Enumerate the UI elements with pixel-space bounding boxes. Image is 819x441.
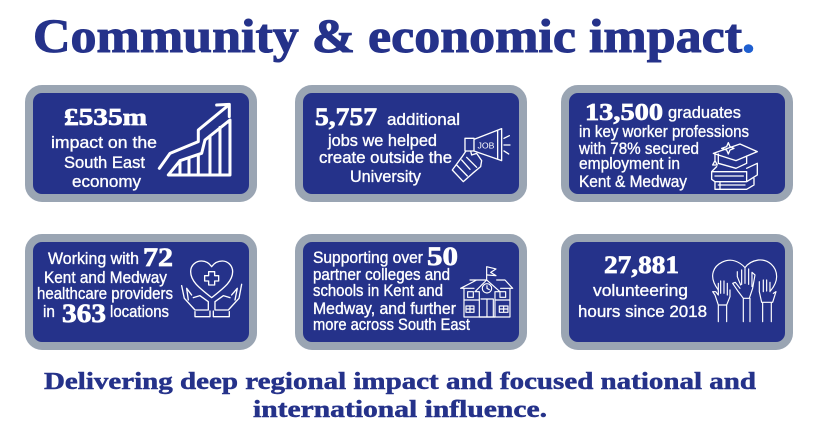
text: partner description: partner colleges and: [313, 266, 450, 284]
statistic: 27,881: 27,881: [604, 252, 679, 279]
text: jobs description: jobs we helped: [327, 132, 437, 150]
text: healthcare description: in: [43, 303, 55, 321]
text: partner description: more across South East: [313, 316, 470, 334]
icon: school building with flag: [461, 267, 513, 317]
text: partner description: Supporting over: [313, 249, 423, 267]
closing statement: [44, 369, 757, 423]
title: Community & economic impact .: [33, 10, 755, 63]
text: graduates description: with 78% secured: [578, 140, 699, 158]
text: healthcare description: healthcare providers: [37, 285, 173, 303]
text: volunteering description: [578, 282, 707, 321]
text: impact description: economy: [72, 173, 142, 191]
panel: partner colleges and schools: [299, 238, 523, 346]
panel: economic impact: [29, 89, 253, 198]
text: volunteering description: volunteering: [593, 282, 688, 300]
closing statement: Delivering deep regional impact and focused national and: [44, 369, 757, 395]
text: graduates description: employment in: [579, 155, 680, 173]
card frame: [29, 89, 253, 198]
text: healthcare description: Kent and Medway: [44, 269, 168, 287]
panel: additional jobs: [299, 89, 523, 198]
text: partner description: schools in Kent and: [313, 282, 443, 300]
statistic: 363: 363: [62, 299, 106, 328]
card frame: [29, 238, 253, 346]
icon: megaphone held in fist: [452, 129, 510, 182]
text: healthcare description: [37, 250, 173, 321]
card frame: [565, 89, 789, 198]
text: graduates description: [578, 104, 749, 191]
text: graduates description: Kent & Medway: [579, 173, 688, 191]
text: jobs description: create outside the: [319, 149, 452, 167]
text: impact description: [51, 134, 157, 191]
panel: healthcare providers: [29, 238, 253, 346]
statistic: 50: 50: [427, 242, 458, 271]
icon: hands holding heart with cross: [182, 261, 242, 317]
text: impact description: South East: [64, 154, 145, 172]
card frame: [565, 238, 789, 346]
icon: rising chart with arrow: [159, 104, 230, 175]
text: partner description: Medway, and further: [313, 300, 456, 318]
panel: graduates: [565, 89, 789, 198]
text: graduates description: graduates: [668, 104, 741, 122]
text: jobs description: University: [350, 168, 422, 186]
text: graduates description: in key worker professions: [579, 123, 749, 141]
icon: megaphone held in fist: JOB: [478, 141, 495, 151]
closing statement: international influence.: [253, 397, 547, 423]
statistic: 13,500: 13,500: [585, 100, 663, 126]
card frame: [299, 238, 523, 346]
text: healthcare description: locations: [110, 303, 169, 321]
text: jobs description: [319, 111, 460, 186]
statistic: 72: 72: [143, 243, 173, 272]
statistic: £535m: £535m: [64, 105, 147, 131]
panel: volunteering hours: [565, 238, 789, 346]
card frame: [299, 89, 523, 198]
text: jobs description: additional: [387, 111, 460, 129]
icon: raised hands in front of heart: [713, 260, 777, 322]
icon: graduation cap on books: [712, 143, 757, 189]
text: impact description: impact on the: [51, 134, 157, 152]
text: volunteering description: hours since 2018: [578, 303, 707, 321]
statistic: 5,757: 5,757: [315, 104, 377, 131]
text: partner description: [313, 249, 470, 334]
text: healthcare description: Working with: [48, 250, 139, 268]
